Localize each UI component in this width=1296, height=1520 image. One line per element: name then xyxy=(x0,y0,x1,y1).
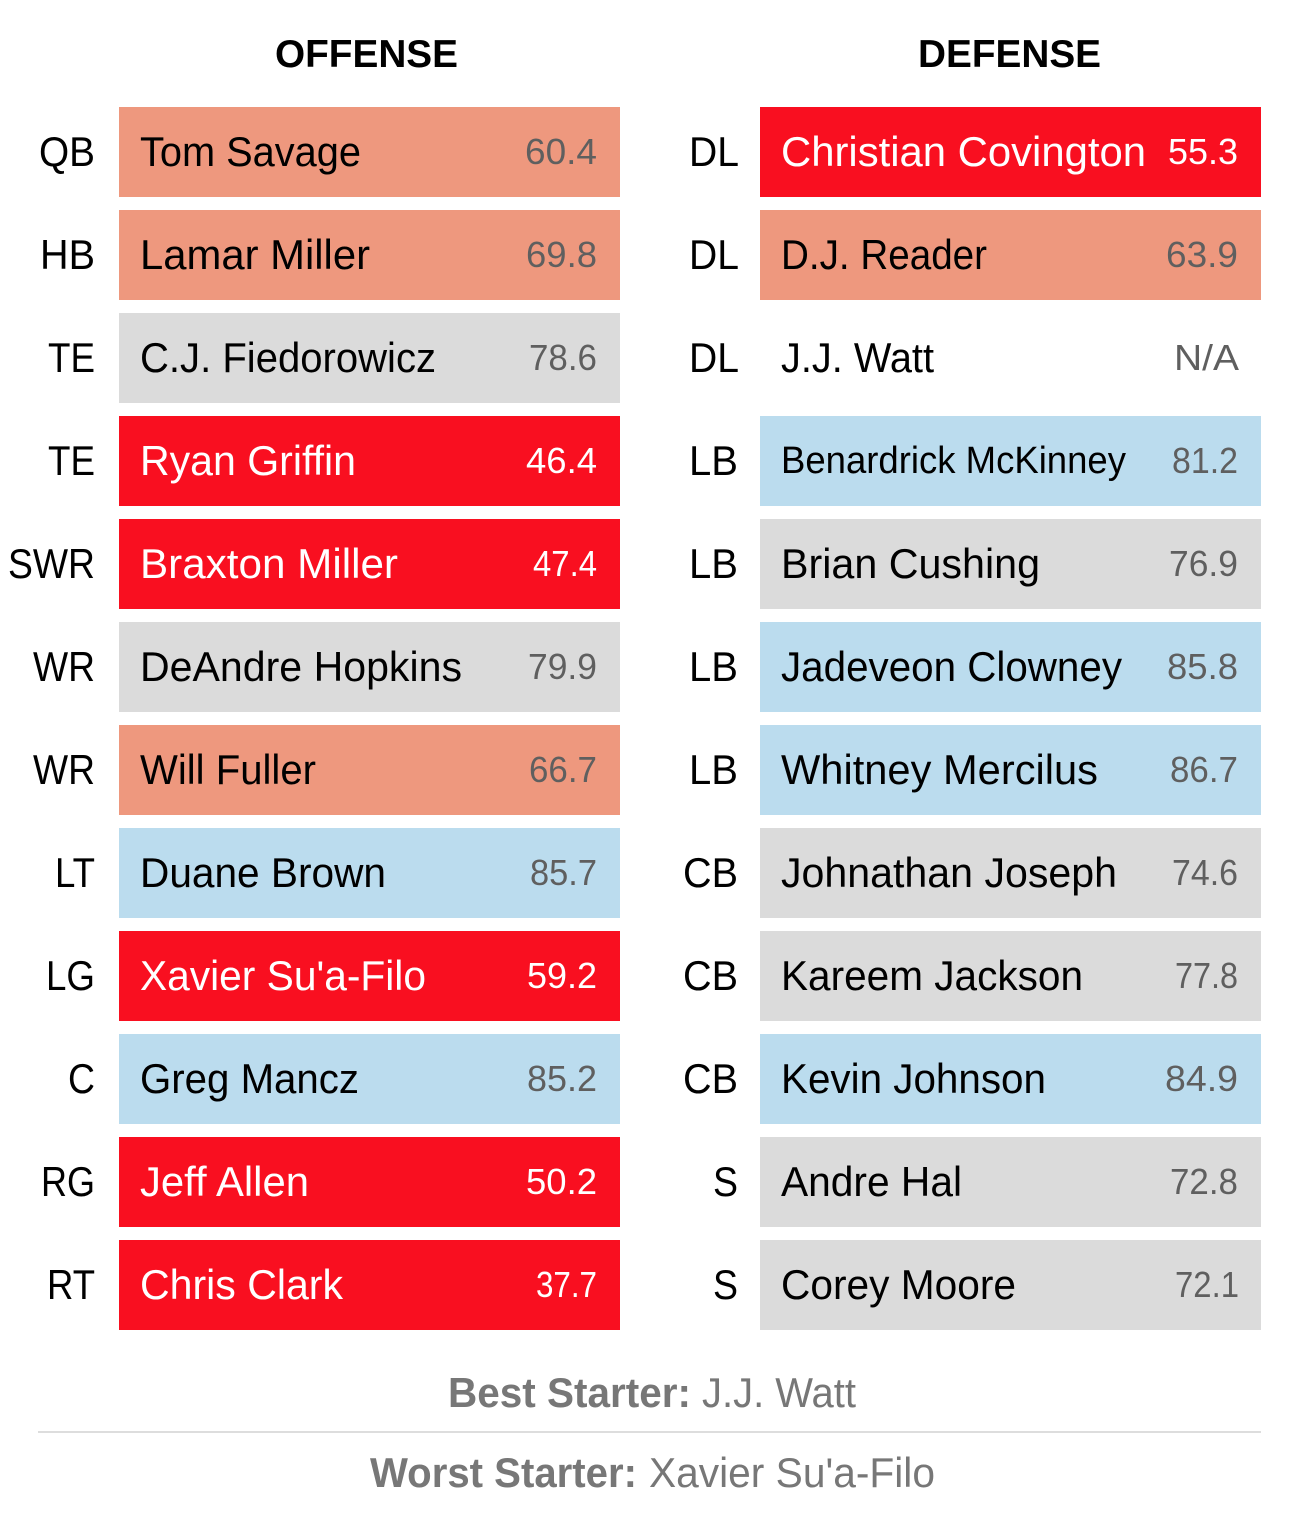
row: SWR Braxton Miller: SWR xyxy=(8,540,95,587)
row: LT Duane Brown: LT xyxy=(55,849,95,896)
row: C Greg Mancz xyxy=(68,1034,620,1124)
row: LB Brian Cushing: Brian Cushing xyxy=(781,540,1040,587)
row: TE Ryan Griffin: 46.4 xyxy=(526,440,597,481)
row: CB Johnathan Joseph: 74.6 xyxy=(1172,852,1238,893)
row: LB Jadeveon Clowney: 85.8 xyxy=(1167,646,1238,687)
row: DL D.J. Reader: 63.9 xyxy=(1166,234,1238,275)
row: CB Kevin Johnson: Kevin Johnson xyxy=(781,1055,1046,1102)
row: S Corey Moore: Corey Moore xyxy=(781,1261,1016,1308)
row: LB Brian Cushing: LB xyxy=(689,540,738,587)
row: RT Chris Clark xyxy=(47,1240,620,1330)
row: CB Johnathan Joseph xyxy=(683,828,1261,918)
row: TE C.J. Fiedorowicz: C.J. Fiedorowicz xyxy=(140,334,436,381)
row: LT Duane Brown: 85.7 xyxy=(530,852,597,893)
row: DL J.J. Watt xyxy=(689,334,1239,381)
row: CB Kareem Jackson: Kareem Jackson xyxy=(781,952,1083,999)
row: DL Christian Covington: 55.3 xyxy=(1168,131,1238,172)
row: QB Tom Savage: Tom Savage xyxy=(140,128,361,175)
row: TE C.J. Fiedorowicz: TE xyxy=(48,334,95,381)
row: TE C.J. Fiedorowicz: 78.6 xyxy=(529,337,597,378)
row: RG Jeff Allen: RG xyxy=(41,1158,95,1205)
row: DL J.J. Watt: DL xyxy=(689,334,739,381)
row: LG Xavier Su'a-Filo: 59.2 xyxy=(527,955,597,996)
row: LB Whitney Mercilus: 86.7 xyxy=(1170,749,1238,790)
row: DL D.J. Reader xyxy=(689,210,1261,300)
text: worst starter: Worst Starter: xyxy=(370,1449,637,1496)
panel: defense roster xyxy=(683,107,1261,1330)
row: C Greg Mancz: 85.2 xyxy=(527,1058,597,1099)
row: C Greg Mancz: C xyxy=(68,1055,95,1102)
row: LB Brian Cushing xyxy=(689,519,1261,609)
row: LG Xavier Su'a-Filo: Xavier Su'a-Filo xyxy=(140,952,426,999)
row: S Andre Hal: Andre Hal xyxy=(781,1158,962,1205)
row: LB Benardrick McKinney: LB xyxy=(689,437,738,484)
row: DL J.J. Watt: N/A xyxy=(1174,337,1239,378)
row: LB Benardrick McKinney xyxy=(689,416,1261,506)
row: DL D.J. Reader: D.J. Reader xyxy=(781,231,987,278)
row: CB Kevin Johnson: CB xyxy=(683,1055,738,1102)
row: TE C.J. Fiedorowicz xyxy=(48,313,620,403)
row: LG Xavier Su'a-Filo: LG xyxy=(46,952,95,999)
row: CB Kareem Jackson: CB xyxy=(683,952,738,999)
heading: defense: DEFENSE xyxy=(918,33,1101,76)
row: LB Benardrick McKinney: 81.2 xyxy=(1172,440,1238,481)
row: CB Johnathan Joseph: CB xyxy=(683,849,738,896)
row: WR DeAndre Hopkins: WR xyxy=(33,643,95,690)
row: RT Chris Clark: RT xyxy=(47,1261,95,1308)
row: RG Jeff Allen xyxy=(41,1137,620,1227)
row: QB Tom Savage: QB xyxy=(39,128,95,175)
row: CB Kareem Jackson: 77.8 xyxy=(1175,955,1238,996)
row: DL D.J. Reader: DL xyxy=(689,231,739,278)
row: S Andre Hal xyxy=(713,1137,1261,1227)
row: HB Lamar Miller: 69.8 xyxy=(526,234,597,275)
row: RG Jeff Allen: 50.2 xyxy=(526,1161,597,1202)
row: RT Chris Clark: Chris Clark xyxy=(140,1261,344,1308)
row: DL Christian Covington xyxy=(689,107,1261,197)
row: WR DeAndre Hopkins: DeAndre Hopkins xyxy=(140,643,462,690)
row: LT Duane Brown: Duane Brown xyxy=(140,849,386,896)
text: worst starter: Xavier Su'a-Filo xyxy=(649,1449,935,1496)
row: RG Jeff Allen: Jeff Allen xyxy=(140,1158,309,1205)
row: WR Will Fuller: Will Fuller xyxy=(140,746,316,793)
row: WR Will Fuller xyxy=(33,725,620,815)
row: LB Jadeveon Clowney: Jadeveon Clowney xyxy=(781,643,1122,690)
text: best starter xyxy=(448,1369,856,1416)
row: SWR Braxton Miller xyxy=(8,519,620,609)
row: LB Whitney Mercilus xyxy=(689,725,1261,815)
heading: offense: OFFENSE xyxy=(275,33,458,76)
row: LB Benardrick McKinney: Benardrick McKinney xyxy=(781,440,1126,482)
row: S Corey Moore xyxy=(713,1240,1261,1330)
row: QB Tom Savage: 60.4 xyxy=(525,131,597,172)
row: WR Will Fuller: 66.7 xyxy=(529,749,597,790)
row: DL Christian Covington: Christian Covington xyxy=(781,128,1146,175)
row: LB Whitney Mercilus: LB xyxy=(689,746,738,793)
panel: offense roster xyxy=(8,107,620,1330)
text: best starter: J.J. Watt xyxy=(702,1369,856,1416)
row: LB Jadeveon Clowney: LB xyxy=(689,643,738,690)
row: S Corey Moore: S xyxy=(713,1261,738,1308)
row: CB Kareem Jackson xyxy=(683,931,1261,1021)
row: SWR Braxton Miller: Braxton Miller xyxy=(140,540,398,587)
row: LT Duane Brown xyxy=(55,828,620,918)
row: TE Ryan Griffin: Ryan Griffin xyxy=(140,437,356,484)
row: LG Xavier Su'a-Filo xyxy=(46,931,620,1021)
row: S Andre Hal: 72.8 xyxy=(1170,1161,1238,1202)
row: QB Tom Savage xyxy=(39,107,620,197)
row: TE Ryan Griffin xyxy=(48,416,620,506)
row: RT Chris Clark: 37.7 xyxy=(536,1264,597,1305)
row: WR Will Fuller: WR xyxy=(33,746,95,793)
row: TE Ryan Griffin: TE xyxy=(48,437,95,484)
row: SWR Braxton Miller: 47.4 xyxy=(533,543,597,584)
row: LB Jadeveon Clowney xyxy=(689,622,1261,712)
row: DL Christian Covington: DL xyxy=(689,128,739,175)
text: worst starter xyxy=(370,1449,935,1496)
row: S Andre Hal: S xyxy=(713,1158,738,1205)
row: DL J.J. Watt: J.J. Watt xyxy=(781,334,934,381)
row: HB Lamar Miller: Lamar Miller xyxy=(140,231,370,278)
row: S Corey Moore: 72.1 xyxy=(1175,1264,1239,1305)
row: CB Kevin Johnson: 84.9 xyxy=(1165,1058,1238,1099)
row: LB Brian Cushing: 76.9 xyxy=(1169,543,1238,584)
row: CB Johnathan Joseph: Johnathan Joseph xyxy=(781,849,1117,896)
row: WR DeAndre Hopkins: 79.9 xyxy=(528,646,597,687)
row: CB Kevin Johnson xyxy=(683,1034,1261,1124)
text: best starter: Best Starter: xyxy=(448,1369,691,1416)
row: WR DeAndre Hopkins xyxy=(33,622,620,712)
row: LB Whitney Mercilus: Whitney Mercilus xyxy=(781,746,1098,793)
row: HB Lamar Miller: HB xyxy=(40,231,95,278)
row: C Greg Mancz: Greg Mancz xyxy=(140,1055,359,1102)
row: HB Lamar Miller xyxy=(40,210,620,300)
